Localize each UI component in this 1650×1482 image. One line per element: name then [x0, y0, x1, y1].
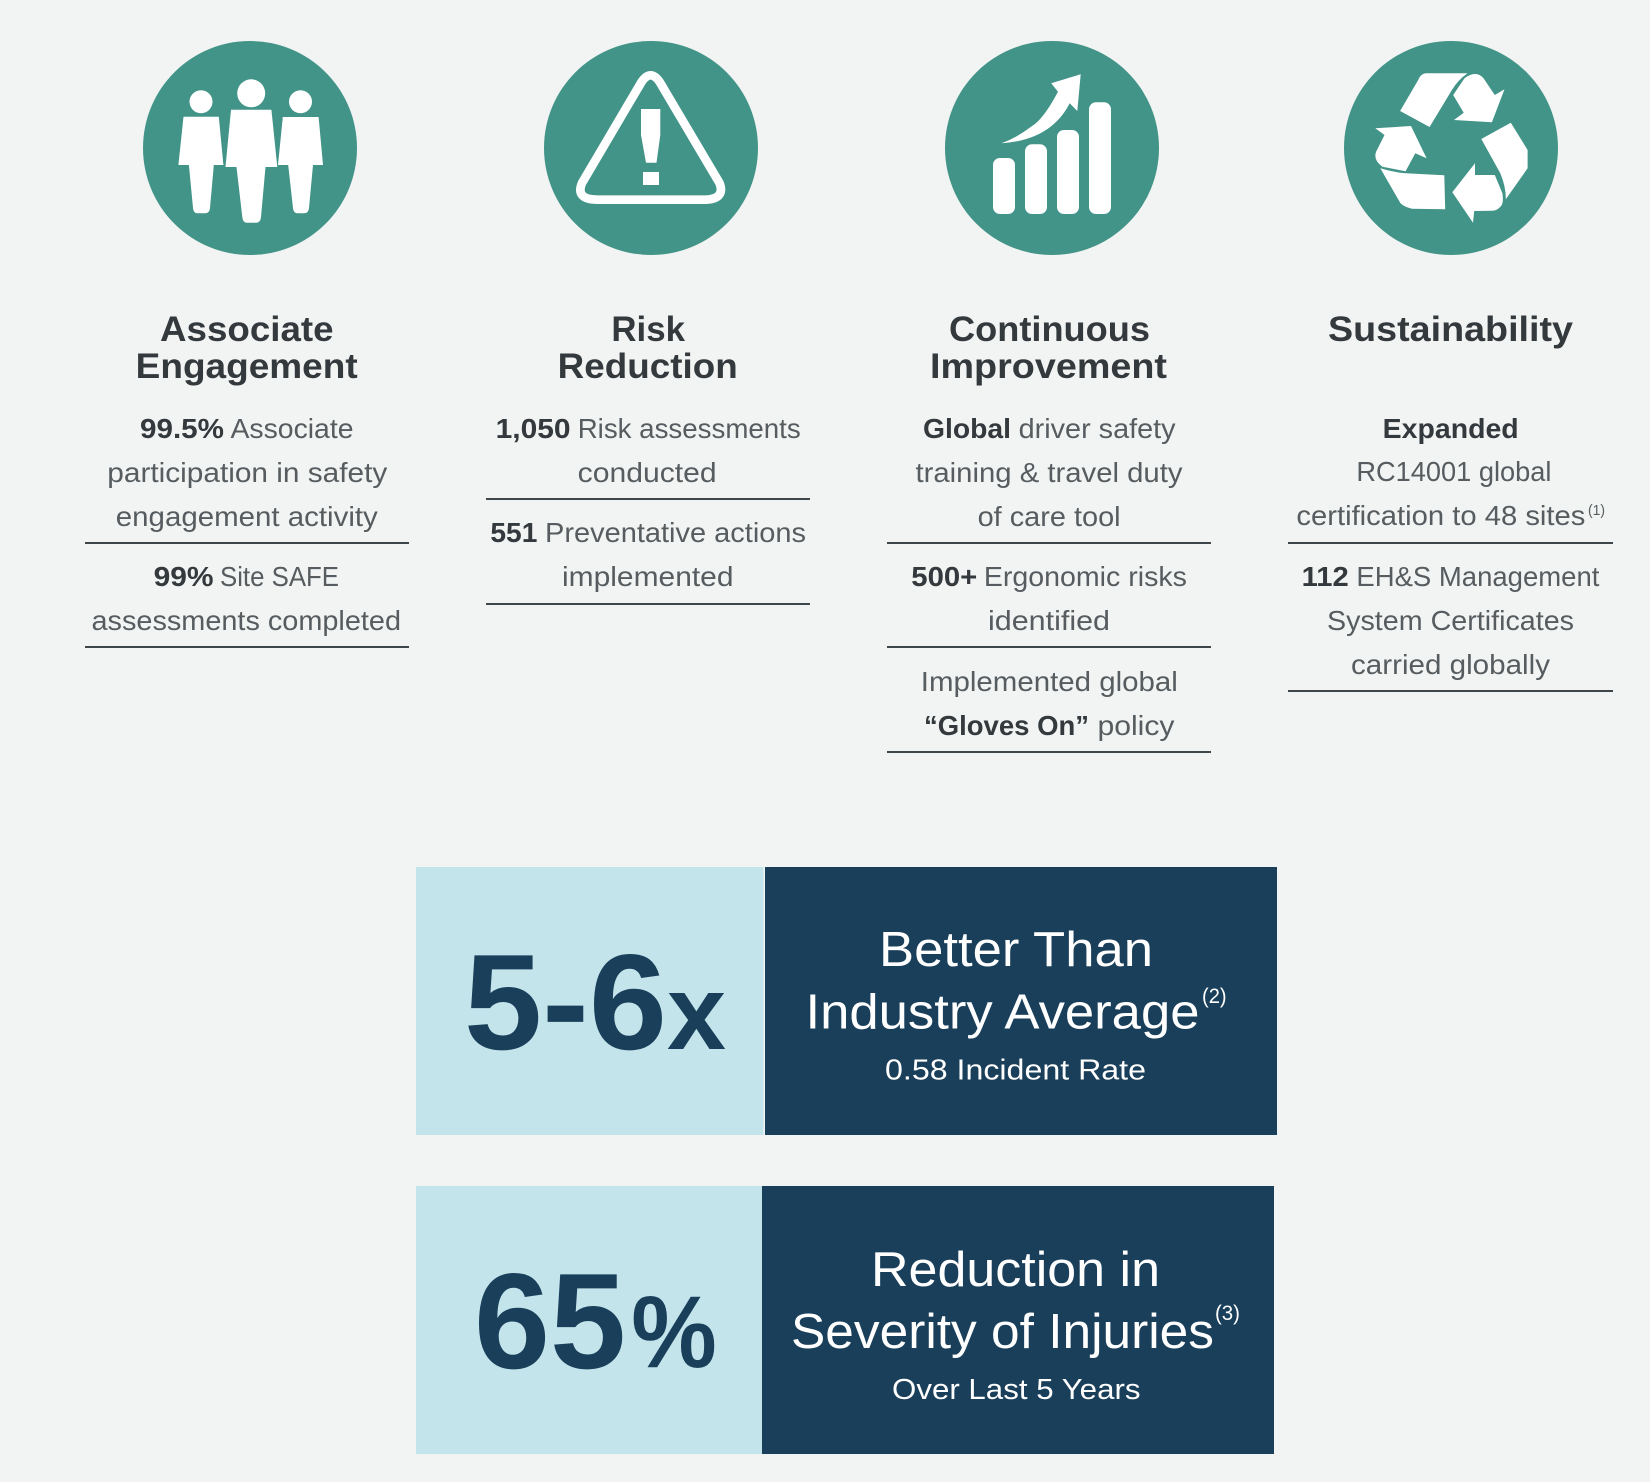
text block: 500+ ergonomic risks [911, 561, 1187, 636]
text block: global driver safety: driver safety [1019, 413, 1176, 444]
text block: gloves on policy: policy [1098, 710, 1174, 741]
text block: 551 preventative actions: Preventative actions [545, 517, 806, 548]
panel: associate engagement [85, 41, 409, 647]
panel: continuous improvement [887, 41, 1211, 752]
stat value panel: 65% [416, 1186, 762, 1454]
heading: Associate Engagement [136, 310, 358, 386]
icon: three people [143, 41, 357, 255]
text block: 112 EH&S certificates: 112 [1302, 561, 1349, 592]
text block: 112 EH&S certificates: carried globally [1351, 649, 1550, 680]
text block: global driver safety: of care tool [978, 501, 1121, 532]
text block: 551 preventative actions [490, 517, 806, 592]
heading: Risk Reduction: Risk [611, 310, 686, 349]
text block: gloves on policy: Implemented global [921, 666, 1178, 697]
text block: 99.5% participation: Associate [230, 413, 354, 444]
text block: expanded RC14001: certification to 48 sites [1296, 500, 1585, 531]
stat description panel: Reduction in [871, 1243, 1160, 1297]
text block: 99.5% participation: 99.5% [140, 413, 224, 444]
text block: 99% Site SAFE: 99% [154, 561, 214, 592]
text block: 551 preventative actions: implemented [562, 561, 734, 592]
stat card: 65% reduction in severity of injuries [416, 1186, 1274, 1454]
stat value panel: 65%: % [631, 1275, 717, 1389]
text block: 99% Site SAFE: assessments completed [92, 605, 401, 636]
text block: 500+ ergonomic risks: Ergonomic risks [984, 561, 1187, 592]
heading: Associate Engagement: Engagement [136, 347, 358, 386]
text block: global driver safety: Global [923, 413, 1011, 444]
text block: 1,050 risk assessments: conducted [578, 457, 717, 488]
heading: Risk Reduction [558, 310, 738, 386]
text block: 112 EH&S certificates [1302, 561, 1600, 680]
text block: 1,050 risk assessments: 1,050 [496, 413, 571, 444]
stat description panel: (2) [1202, 985, 1227, 1008]
text block: 112 EH&S certificates: EH&S Management [1356, 561, 1600, 592]
text block: global driver safety: training & travel duty [916, 457, 1182, 488]
text block: expanded RC14001: RC14001 global [1356, 456, 1551, 487]
icon: warning triangle [544, 41, 758, 255]
stat description panel: (3) [1215, 1302, 1240, 1325]
text block: 551 preventative actions: 551 [490, 517, 537, 548]
heading: Continuous Improvement [930, 310, 1167, 386]
heading: Risk Reduction: Reduction [558, 347, 738, 386]
text block: expanded RC14001 [1296, 413, 1605, 531]
heading: Associate Engagement: Associate [160, 310, 334, 349]
text block: 1,050 risk assessments: Risk assessments [578, 413, 801, 444]
text block: 99% Site SAFE: Site SAFE [220, 561, 339, 592]
stat value panel: 5-6x: 5-6 [464, 926, 667, 1078]
icon: recycling arrows [1344, 41, 1558, 255]
stat description panel: 0.58 Incident Rate [885, 1055, 1146, 1087]
text block: 500+ ergonomic risks: 500+ [911, 561, 977, 592]
stat description panel: Severity of Injuries [791, 1305, 1214, 1359]
icon: rising bar chart [945, 41, 1159, 255]
stat value panel: 5-6x [416, 867, 764, 1135]
text block: 99.5% participation [107, 413, 387, 532]
text block: gloves on policy [921, 666, 1178, 741]
panel: risk reduction [486, 41, 810, 604]
text block: global driver safety [916, 413, 1182, 532]
text block: 99.5% participation: participation in safety [107, 457, 387, 488]
text block: expanded RC14001: Expanded [1383, 413, 1519, 444]
text block: 1,050 risk assessments [496, 413, 801, 488]
stat value panel: 5-6x: x [667, 954, 726, 1072]
panel: sustainability [1288, 41, 1613, 691]
text block: 500+ ergonomic risks: identified [988, 605, 1110, 636]
heading: Sustainability: Sustainability [1328, 310, 1574, 349]
heading: Continuous Improvement: Continuous [949, 310, 1150, 349]
stat description panel [765, 867, 1277, 1135]
text block: gloves on policy: “Gloves On” [924, 710, 1089, 741]
stat description panel: Over Last 5 Years [892, 1374, 1140, 1406]
stat description panel: Industry Average [806, 986, 1200, 1040]
text block: 99% Site SAFE [92, 561, 401, 636]
text block: expanded RC14001: (1) [1588, 502, 1605, 519]
heading: Continuous Improvement: Improvement [930, 347, 1167, 386]
stat description panel: Better Than [879, 923, 1153, 977]
stat description panel [762, 1186, 1274, 1454]
text block: 112 EH&S certificates: System Certificates [1327, 605, 1574, 636]
stat value panel: 65%: 65 [474, 1245, 626, 1397]
stat card: 5-6x better than industry average [416, 867, 1277, 1135]
text block: 99.5% participation: engagement activity [116, 501, 378, 532]
